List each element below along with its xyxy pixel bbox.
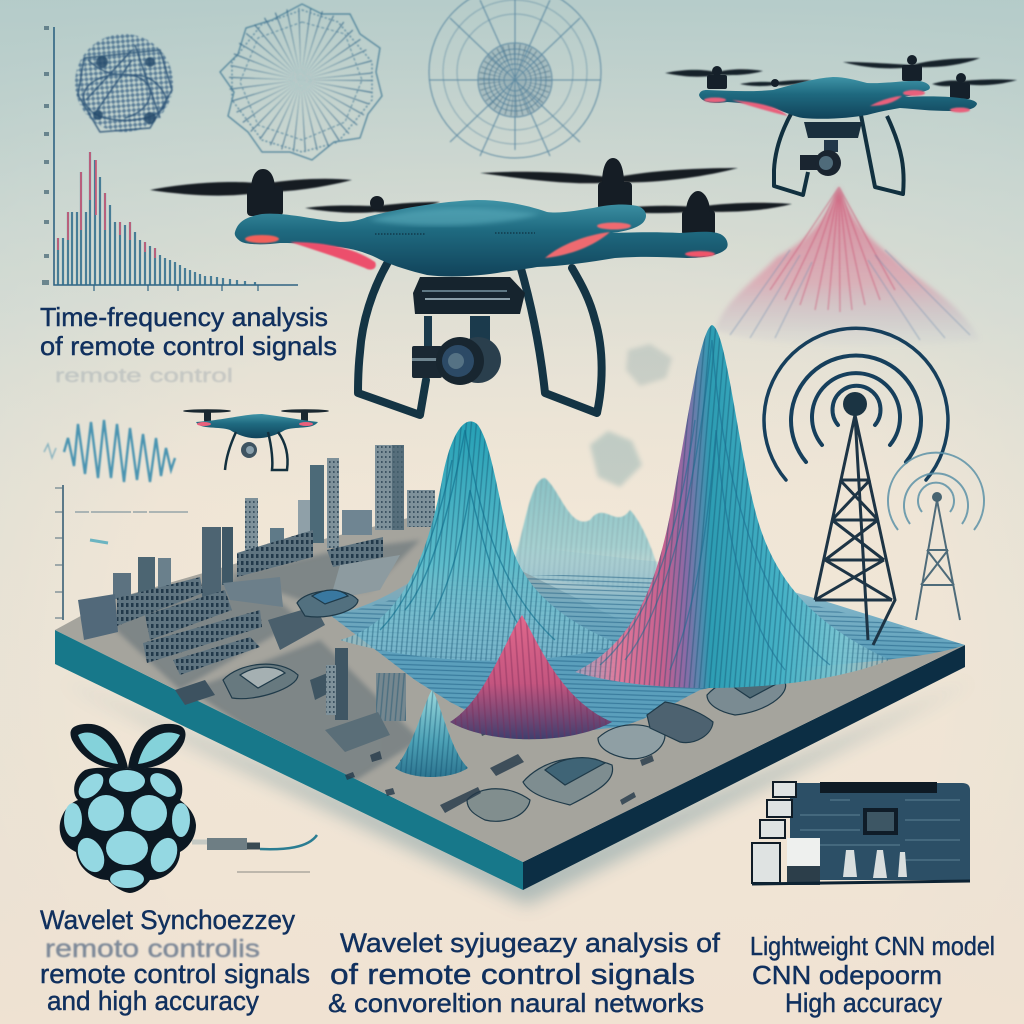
- berries: [64, 768, 190, 888]
- car: white: [598, 725, 665, 759]
- propellers: [665, 58, 1017, 86]
- heading: time-frequency: of remote control signals: [40, 331, 337, 361]
- platform: [55, 515, 965, 890]
- pink lights: [704, 90, 970, 116]
- car: silver sedan: [523, 758, 613, 805]
- motors: [707, 55, 970, 99]
- drone: main: [150, 158, 792, 415]
- chart spectrum bars: [58, 152, 255, 285]
- small drone: [183, 409, 329, 470]
- mountain: small teal: [395, 690, 468, 777]
- motors: [247, 158, 715, 236]
- propellers: [150, 168, 792, 213]
- sketch: radial star plot: [220, 4, 382, 160]
- body highlight: [370, 208, 540, 226]
- car: low block: [223, 664, 298, 699]
- text block: left: [40, 905, 310, 1016]
- signal rings: [764, 328, 948, 480]
- text block: centre: & convoreltion naural networks: [328, 988, 704, 1018]
- text block: left: remoto controlis: [45, 935, 260, 963]
- berry silhouette: [60, 768, 196, 893]
- chart pink highlights: [58, 152, 155, 258]
- usb ports: [752, 782, 796, 883]
- board edge: [752, 881, 970, 884]
- text block: right: Lightweight CNN model: [750, 931, 995, 961]
- leaf outlines: [71, 724, 186, 769]
- ethernet port: [787, 838, 820, 885]
- arm glows: [245, 222, 715, 270]
- gimbal and camera: [800, 122, 862, 176]
- landing gear: [774, 110, 904, 195]
- text block: right: High accuracy: [785, 988, 942, 1018]
- ground mottling: [100, 540, 420, 790]
- sketch: tangled signal scribble: [75, 34, 173, 132]
- connectors: [843, 850, 907, 878]
- text block: centre: Wavelet syjugeazy analysis of: [340, 928, 721, 958]
- tower: small with rings: [888, 453, 984, 620]
- platform right side: [523, 645, 965, 890]
- cable: [192, 835, 317, 872]
- chip: [863, 808, 898, 835]
- platform top: [55, 515, 965, 862]
- gpio header: [820, 782, 937, 793]
- leaves: [78, 732, 180, 764]
- camera lens: [412, 337, 501, 385]
- skyscrapers: [113, 445, 435, 599]
- ghost sketches: [590, 344, 672, 487]
- ripple field on ground: [330, 540, 965, 738]
- drone: top right: [665, 55, 1017, 195]
- tower: large with signal rings: [764, 328, 948, 645]
- signal cone under top drone: [715, 187, 980, 347]
- tower frame: [815, 415, 895, 645]
- chart axis ticks: [42, 26, 49, 285]
- cone rays: [770, 187, 895, 312]
- icon: raspberry logo: [60, 724, 196, 893]
- sketch: polar grid: [429, 0, 601, 158]
- heading: time-frequency: [40, 302, 337, 387]
- waveform: [44, 420, 175, 482]
- text block: left: and high accuracy: [47, 986, 259, 1016]
- text block: centre: of remote control signals: [330, 959, 695, 991]
- chart axes: [54, 27, 298, 291]
- car: far sedan: [707, 675, 786, 715]
- text block: left: Wavelet Synchoezzey: [40, 905, 295, 935]
- circuit board: [752, 782, 970, 885]
- vents: [375, 233, 535, 234]
- city: [78, 445, 786, 821]
- heading: time-frequency: remote control: [55, 366, 233, 387]
- body: [699, 77, 977, 119]
- platform shadow: [60, 680, 975, 905]
- gimbal: [413, 277, 525, 348]
- text block: right: CNN odepoorm: [752, 960, 942, 990]
- platform left side: [55, 630, 523, 890]
- pcb: [790, 783, 970, 880]
- car: front boxy: [467, 789, 530, 821]
- cone haze: [715, 187, 980, 347]
- cars: [223, 590, 786, 821]
- car: dark box: [647, 702, 713, 743]
- text block: centre: [328, 928, 721, 1018]
- front buildings: [325, 648, 406, 752]
- mountain: centre: [340, 421, 620, 661]
- mountain: tall: [575, 325, 890, 688]
- axis ticks left: [55, 485, 188, 620]
- mountain: small pink: [450, 615, 612, 739]
- debris front: [345, 726, 654, 813]
- text block: left: remote control signals: [40, 959, 310, 989]
- cone wispy edges: [730, 250, 970, 340]
- body and arms: [235, 200, 728, 276]
- heading: time-frequency: Time-frequency analysis: [40, 302, 328, 332]
- car: back street: [297, 590, 358, 617]
- terraces: [78, 530, 400, 705]
- chart: signal spectrum: [42, 26, 298, 291]
- landing gear: [358, 262, 602, 415]
- distant ghost mountains: [510, 478, 665, 595]
- text block: right: [750, 931, 995, 1018]
